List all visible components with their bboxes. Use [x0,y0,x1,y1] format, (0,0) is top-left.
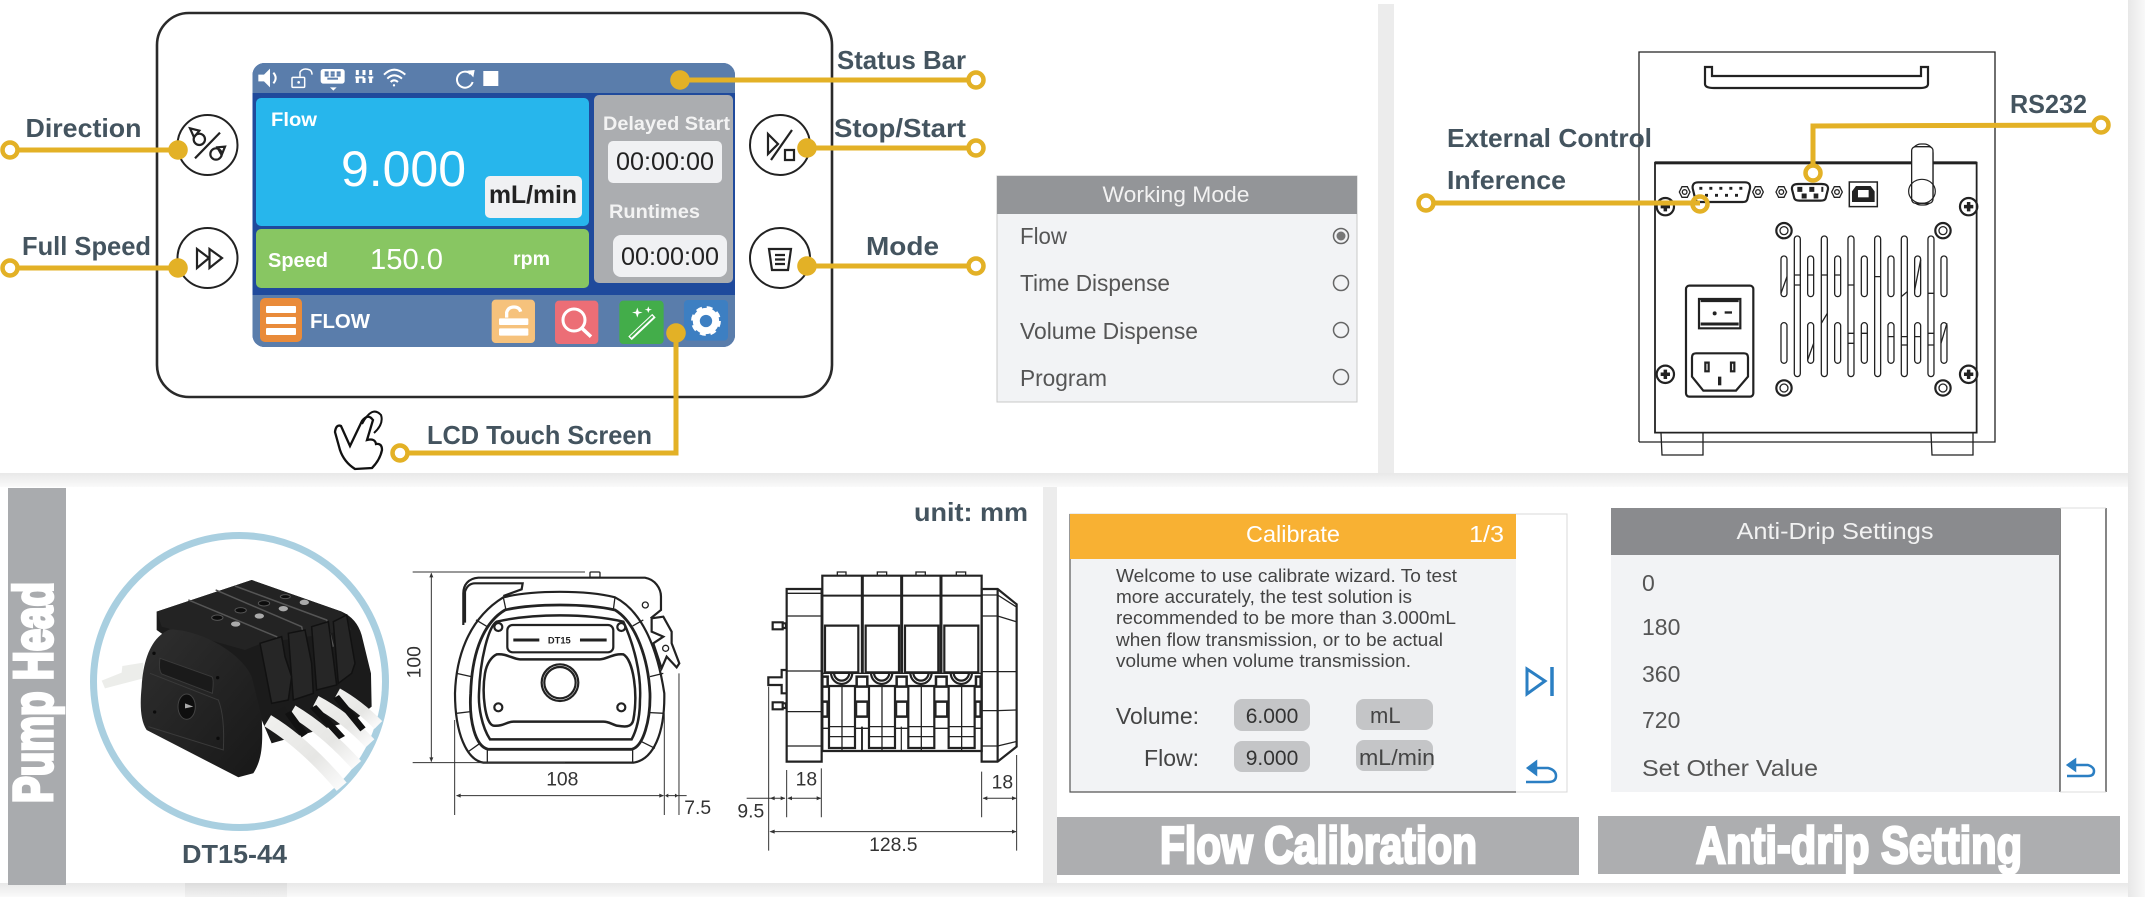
callout: direction: Direction [26,113,142,143]
values [1116,699,1435,772]
speed panel [256,229,589,288]
drawing: pump head front dimensions: DT15 [548,636,571,646]
screws [1657,198,1977,383]
banner: anti-drip setting: Anti-drip Setting [1696,817,2022,875]
instructions: more accurately, the test solution is [1116,586,1412,607]
values: mL/min [1359,745,1435,770]
banner: flow calibration: Flow Calibration [1160,817,1477,875]
dimension 108 [455,673,687,815]
dimensions: 128.5 [869,835,918,856]
header [1611,508,2060,555]
callout: status bar [670,45,984,90]
callout: external control inference: Inference [1447,165,1566,195]
values: Volume: [1116,703,1199,729]
options: 180 [1642,614,1680,640]
dimension 7.5: 7.5 [684,798,711,819]
options: Set Other Value [1642,755,1818,781]
button: full speed [178,228,238,288]
options: 0 [1642,570,1655,596]
callout: mode: Mode [866,231,939,261]
icon: menu [260,298,302,342]
case outline [1639,52,1995,455]
flow panel: 9.000 [341,141,466,197]
power module [1686,286,1753,397]
callout: mode [797,231,984,276]
side heading: Pump Head [2,582,64,803]
options [1642,570,1818,781]
header [1070,514,1516,559]
callout: full speed: Full Speed [22,231,151,261]
panel: working mode menu: Volume Dispense [1020,318,1198,344]
values: mL [1370,703,1401,728]
timers panel: 00:00:00 [621,243,719,271]
callout: external control inference: External Control [1447,123,1652,153]
panel: working mode menu: Program [1020,365,1107,391]
icon: next [1527,667,1552,696]
caption: model: DT15-44 [182,839,288,869]
back plate [1655,147,1977,433]
flow panel [256,98,589,226]
USB port [1849,182,1877,207]
timers panel: Runtimes [609,202,700,223]
panel: anti-drip settings screen [1611,508,2106,792]
panel: working mode menu: Working Mode [1102,182,1250,207]
dimension 100 [405,572,585,763]
instructions [1115,565,1457,671]
values: 6.000 [1246,705,1298,728]
callout: full speed [2,231,188,278]
values: 9.000 [1246,747,1298,770]
standoffs [1776,223,1951,396]
icon: touch hand [335,412,382,469]
bottom bar [252,295,735,347]
header: 1/3 [1469,521,1504,547]
panel: working mode menu [997,176,1357,402]
button: direction [178,115,238,175]
status bar [252,63,735,93]
callout: direction [2,113,188,160]
button: mode [750,228,810,288]
header: Calibrate [1246,521,1340,547]
instructions: recommended to be more than 3.000mL [1116,607,1456,628]
drawing: pump head front dimensions [405,572,711,819]
dimensions: 18 [796,770,817,791]
callout: stop/start [797,113,984,158]
touch screen [252,63,735,347]
radio buttons [1334,228,1348,384]
caption: unit: unit: mm [914,497,1028,527]
speed panel: 150.0 [370,244,443,276]
bottom bar: FLOW [310,311,370,333]
icon: back [2067,760,2094,776]
dimensions: 18 [992,772,1013,793]
instructions: when flow transmission, or to be actual [1115,629,1443,650]
callout: LCD touch screen: LCD Touch Screen [427,420,652,450]
options: 360 [1642,661,1680,687]
dimension 100: 100 [405,646,426,678]
icon: back [1526,762,1556,782]
callout: external control inference [1418,123,1708,212]
timers panel [594,95,733,283]
RS232 port [1776,184,1842,201]
panel: front control panel [2,13,984,469]
dimension 108: 108 [546,770,578,791]
dimensions [737,687,1017,856]
values: Flow: [1144,745,1199,771]
options: 720 [1642,707,1680,733]
instructions: Welcome to use calibrate wizard. To test [1116,565,1457,586]
panel: pump head [2,488,1028,885]
flow panel: mL/min [489,181,577,209]
panel: working mode menu: Flow [1020,223,1067,249]
callout: RS232: RS232 [2010,89,2087,119]
drawing: pump head side dimensions [737,572,1017,856]
speed panel: Speed [268,250,328,272]
button: stop/start [750,115,810,175]
vent slots [1781,236,1947,377]
external control port [1679,182,1763,202]
timers panel: 00:00:00 [616,148,714,176]
timers panel: Delayed Start [603,114,731,135]
instructions: volume when volume transmission. [1116,650,1411,671]
icons: lock, search, wand, gear [492,300,728,344]
callout: LCD touch screen [392,323,686,460]
callout: status bar: Status Bar [837,45,966,75]
panel: flow calibration screen [1070,514,1567,792]
callout: RS232 [1806,89,2108,180]
photo: pump head in circle [94,536,386,828]
panel: rear view [1418,52,2108,455]
status icons [258,69,498,91]
flow panel: Flow [271,110,317,131]
device outline [157,13,832,397]
dimensions: 9.5 [737,801,764,822]
callout: stop/start: Stop/Start [834,113,966,143]
panel: working mode menu: Time Dispense [1020,270,1170,296]
speed panel: rpm [513,248,550,270]
header: Anti-Drip Settings [1736,518,1934,544]
